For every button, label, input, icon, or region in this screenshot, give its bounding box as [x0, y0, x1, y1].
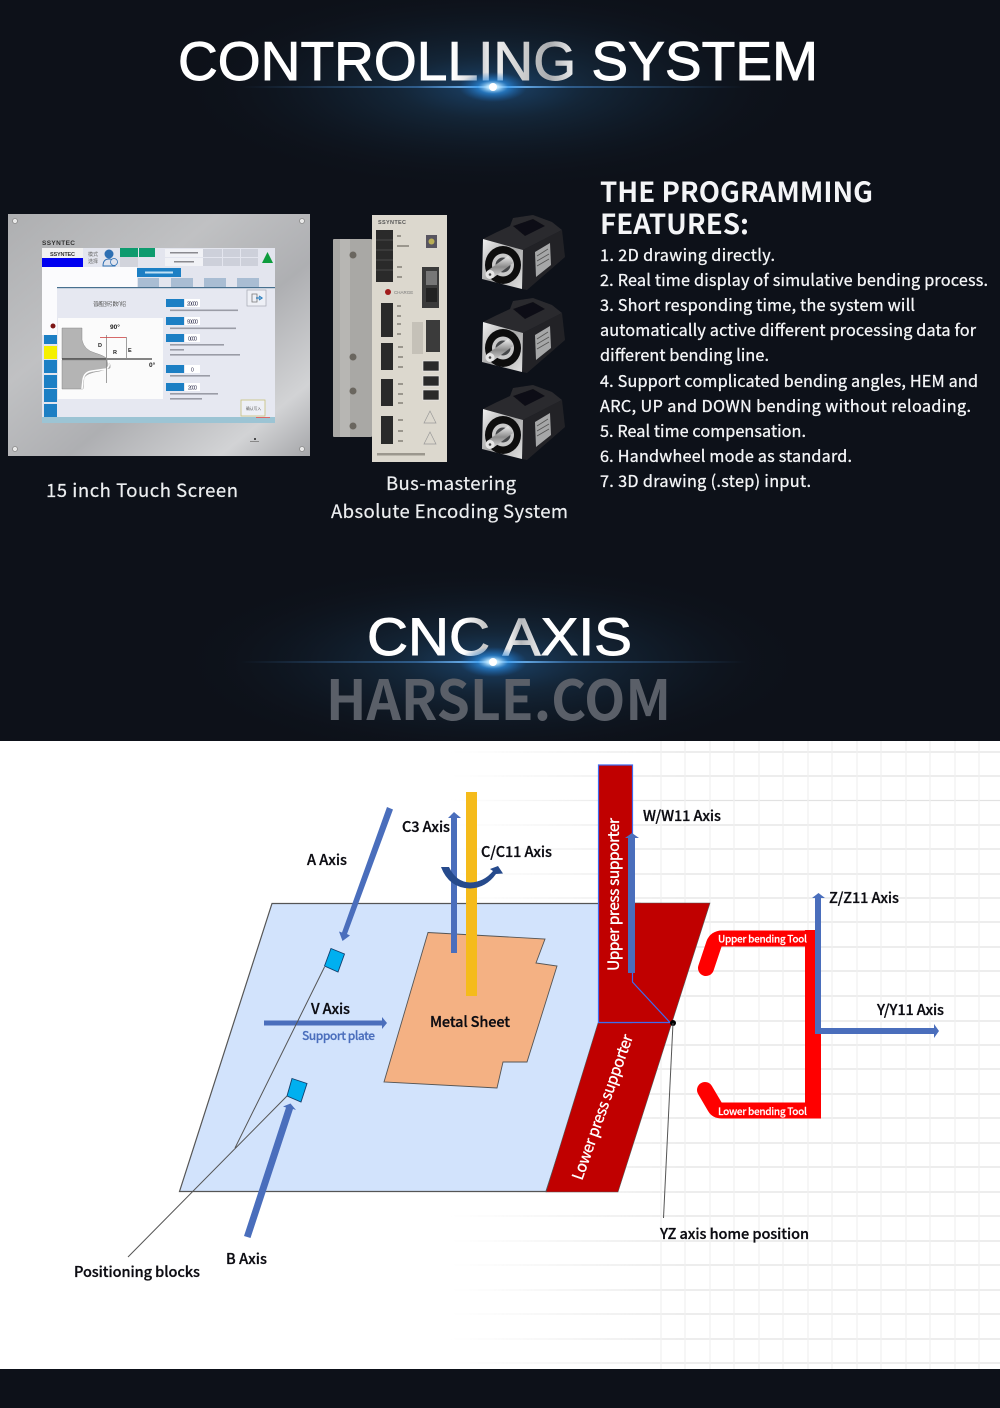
image: 15 inch touch screen panel: 90.000 — [187, 320, 198, 326]
axis labels: Upper bending Tool — [718, 930, 807, 946]
lower press supporter — [546, 903, 710, 1192]
axis labels: Z/Z11 Axis — [829, 887, 899, 908]
axis labels: YZ axis home position — [659, 1223, 809, 1244]
positioning block b — [287, 1078, 307, 1102]
axis labels: C3 Axis — [402, 816, 450, 837]
arrow: b axis — [244, 1104, 296, 1238]
text block: programming features list: automatically active different processing data for — [600, 317, 977, 341]
heading: controlling system — [173, 0, 818, 192]
panel: cnc axis diagram — [0, 741, 1000, 1369]
image: 15 inch touch screen panel: 普通正折引数介绍 — [93, 300, 126, 308]
yellow bar — [466, 792, 477, 996]
image: 15 inch touch screen panel: SSYNTEC — [50, 252, 75, 258]
image: bus-mastering servo drive: SSYNTEC — [378, 220, 406, 226]
text block: programming features list — [600, 242, 988, 492]
axis labels: C/C11 Axis — [481, 841, 552, 862]
positioning block a — [324, 948, 344, 972]
arrow: c/c11 rotation — [441, 866, 503, 888]
arrow: v axis — [264, 1017, 387, 1029]
red tool square corners — [805, 930, 821, 1118]
image: 15 inch touch screen panel: 2.000 — [188, 386, 197, 392]
upper press supporter — [598, 765, 670, 1022]
text block: programming features list: 7. 3D drawing (.step) input. — [600, 468, 811, 492]
text block: programming features list: different bending line. — [600, 342, 769, 366]
axis labels: V Axis — [310, 998, 350, 1019]
text block: programming features list: 3. Short responding time, the system will — [600, 292, 915, 316]
image: servo motor bottom — [482, 385, 565, 460]
axis labels: Support plate — [302, 1027, 375, 1044]
image: 15 inch touch screen panel: 模式 — [88, 251, 98, 258]
axis labels: Positioning blocks — [74, 1261, 200, 1282]
heading: the programming features: THE PROGRAMMING — [600, 170, 873, 210]
image: 15 inch touch screen panel: 0° — [149, 361, 156, 369]
lower press supporter: Lower press supporter — [566, 1030, 638, 1183]
axis labels: A Axis — [307, 849, 347, 870]
heading: controlling system: CONTROLLING SYSTEM — [178, 31, 818, 92]
text block: programming features list: ARC, UP and DOWN bending without reloading. — [600, 393, 971, 417]
caption: bus-mastering absolute encoding system: Bus-mastering — [386, 470, 517, 496]
image: 15 inch touch screen panel: SSYNTEC — [42, 240, 75, 247]
image: 15 inch touch screen panel: D — [98, 343, 102, 349]
yz home position marker — [664, 1020, 676, 1218]
arrow: w/w11 axis — [625, 833, 639, 973]
metal sheet — [384, 932, 557, 1088]
arrow: a axis — [339, 807, 393, 941]
text block: programming features list: 1. 2D drawing directly. — [600, 242, 775, 266]
text block: programming features list: 5. Real time compensation. — [600, 418, 806, 442]
watermark: harsle.com: HARSLE.COM — [326, 656, 671, 736]
metal sheet: Metal Sheet — [430, 1011, 510, 1032]
upper press supporter: Upper press supporter — [602, 817, 624, 971]
image: 15 inch touch screen panel: 选择 — [88, 258, 98, 265]
heading: the programming features: FEATURES: — [600, 202, 749, 242]
caption: 15 inch touch screen: 15 inch Touch Screen — [46, 477, 238, 503]
heading: the programming features — [600, 170, 873, 242]
red bending tools — [705, 938, 813, 1110]
axis labels: Lower bending Tool — [718, 1103, 807, 1118]
arrow: z/z11 and y/y11 axes — [812, 893, 939, 1038]
image: 15 inch touch screen panel: 确认写入 — [246, 406, 261, 411]
image: 15 inch touch screen panel: 0.000 — [188, 336, 197, 342]
support plate — [180, 904, 640, 1192]
axis labels: Y/Y11 Axis — [876, 999, 944, 1020]
image: bus-mastering servo drive: CHARGE — [394, 290, 413, 295]
image: 15 inch touch screen panel: 0 — [191, 368, 194, 374]
image: 15 inch touch screen panel: E — [128, 348, 132, 354]
text block: programming features list: 6. Handwheel mode as standard. — [600, 443, 852, 467]
axis labels: W/W11 Axis — [643, 805, 721, 826]
axis labels — [74, 805, 944, 1282]
axis labels: B Axis — [226, 1248, 267, 1269]
heading: cnc axis — [173, 562, 813, 762]
image: 15 inch touch screen panel: 90° — [110, 323, 120, 331]
text block: programming features list: 4. Support complicated bending angles, HEM and — [600, 368, 978, 392]
image: bus-mastering servo drive — [333, 215, 447, 462]
image: 15 inch touch screen panel: 20.000 — [187, 302, 198, 308]
image: servo motor middle — [482, 298, 565, 373]
text block: programming features list: 2. Real time display of simulative bending process. — [600, 267, 988, 291]
leader lines: positioning blocks — [128, 967, 324, 1257]
image: 15 inch touch screen panel: R — [113, 350, 117, 356]
caption: bus-mastering absolute encoding system: Absolute Encoding System — [331, 498, 568, 524]
image: 15 inch touch screen panel — [8, 214, 310, 456]
image: servo motor top — [482, 215, 565, 290]
heading: cnc axis: CNC AXIS — [367, 608, 632, 667]
caption: bus-mastering absolute encoding system — [331, 470, 568, 524]
arrow: c3 axis — [448, 812, 461, 953]
